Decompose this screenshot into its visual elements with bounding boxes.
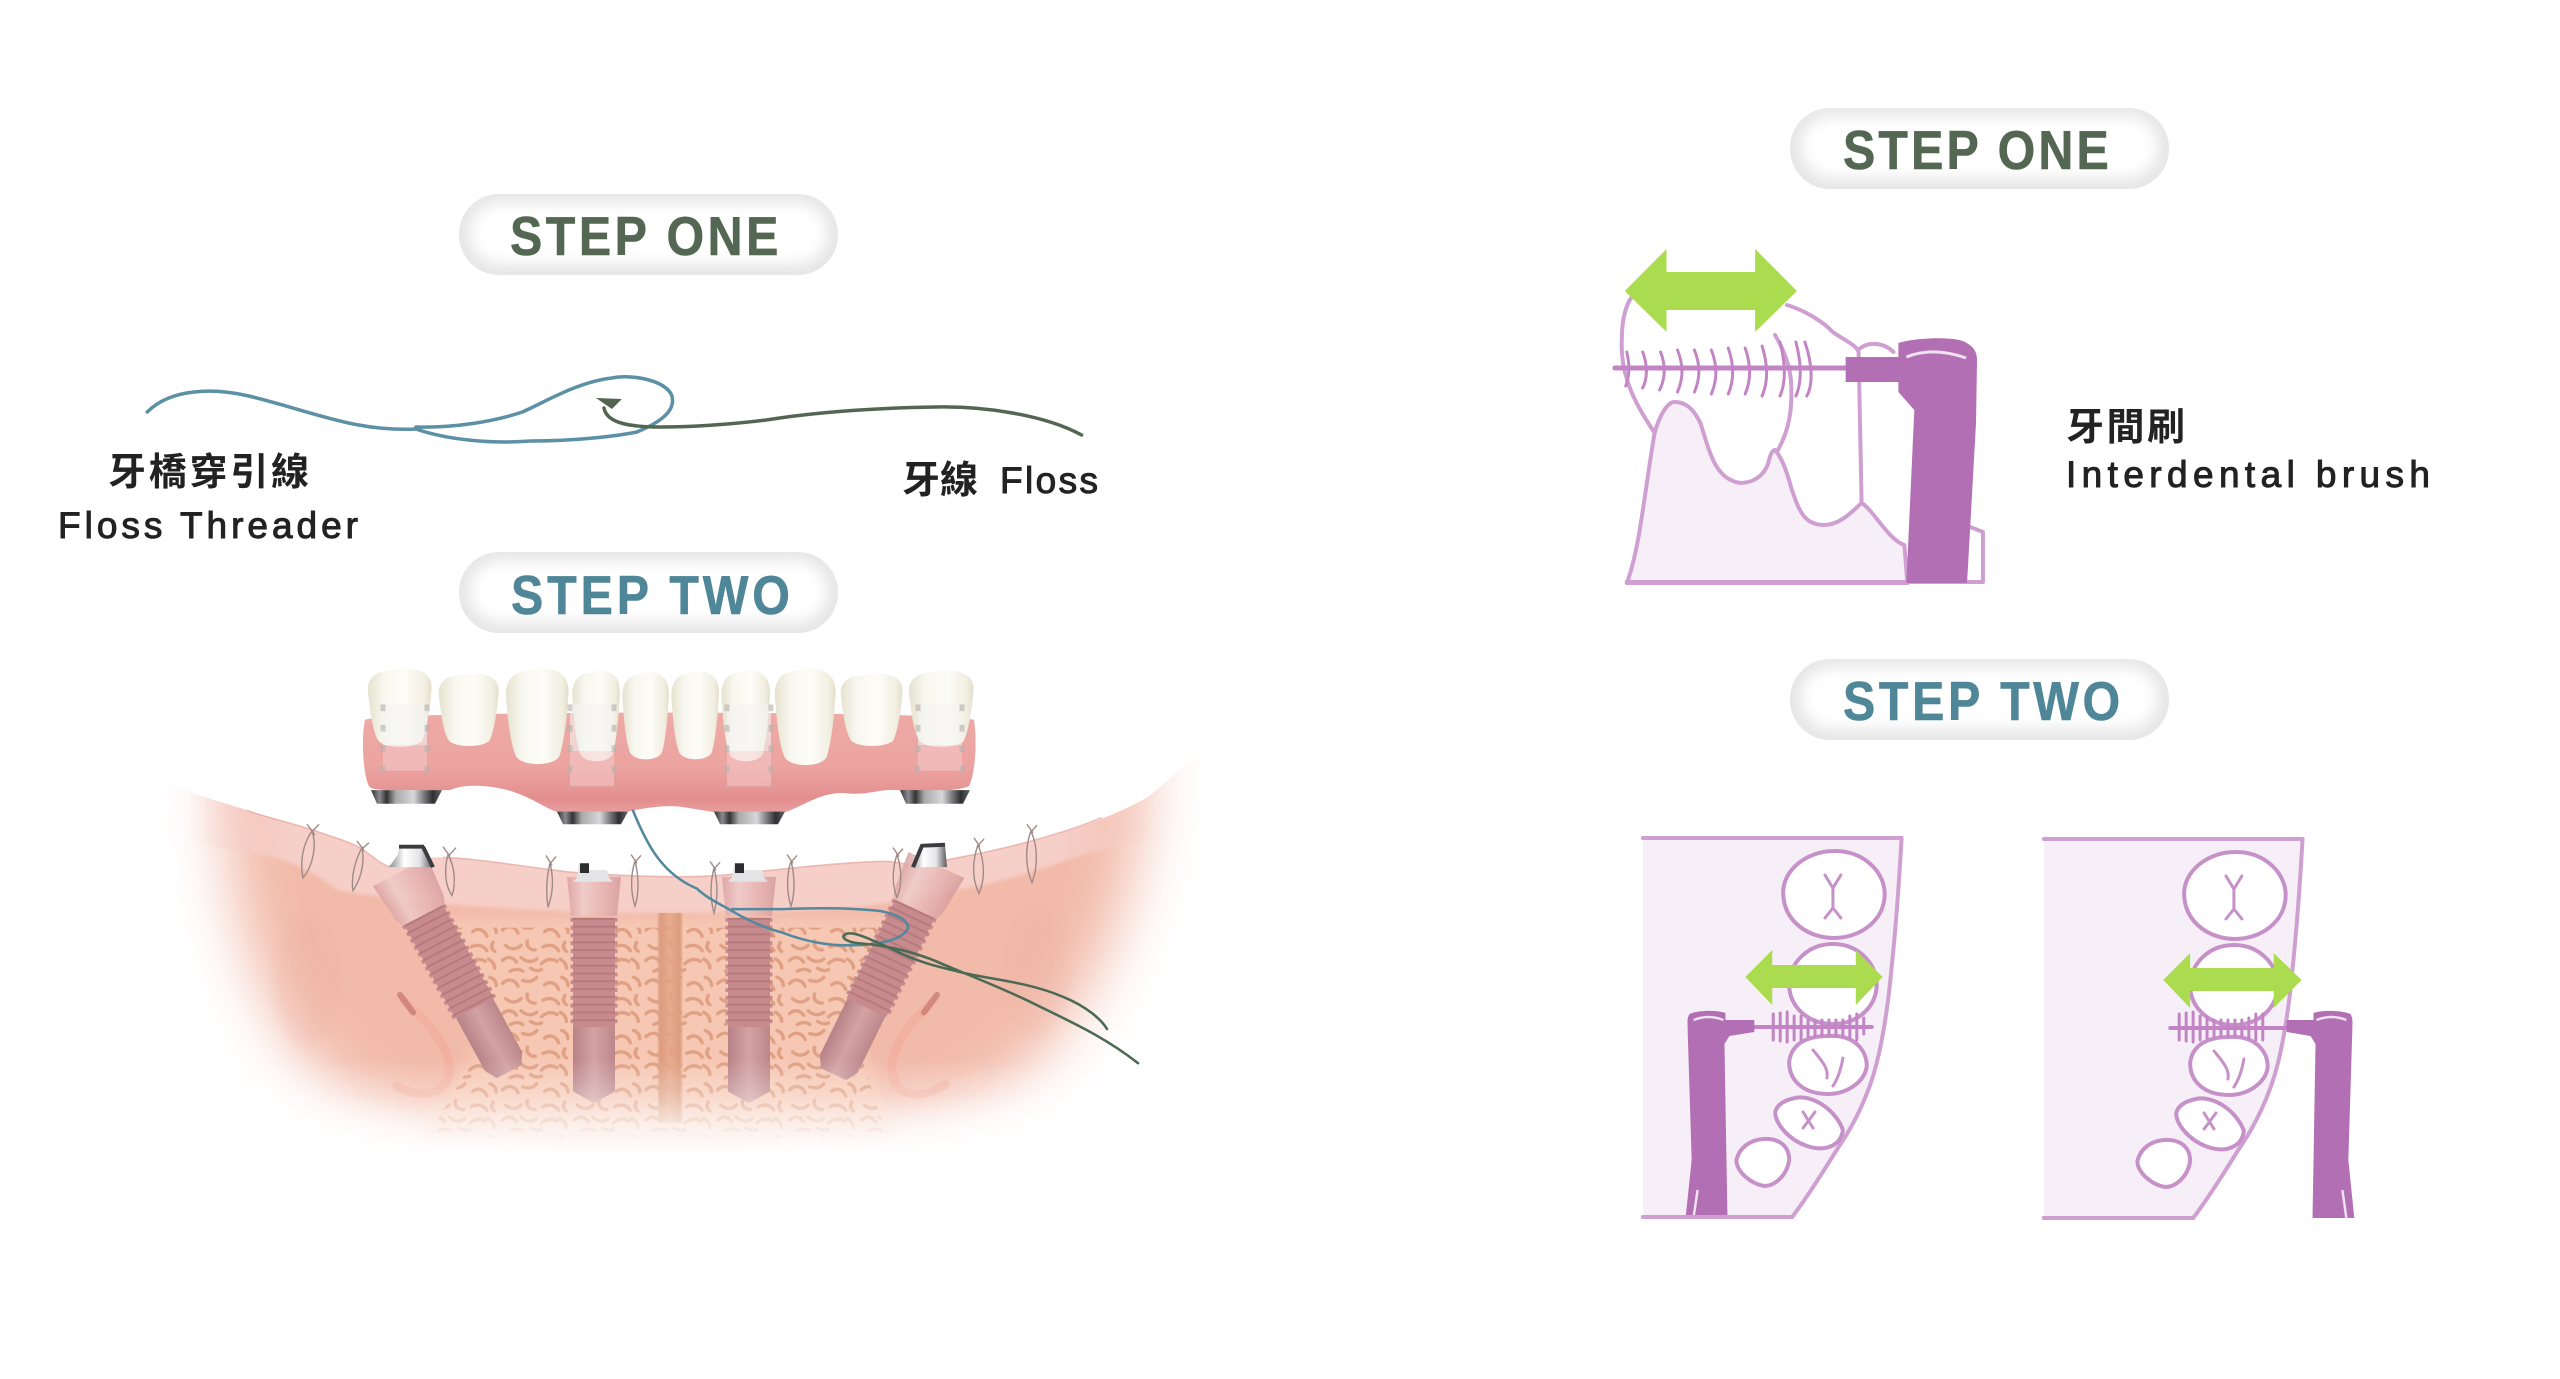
gum [1627,402,1907,583]
illustration: brush from the tongue side [1643,838,1902,1217]
illustration: brush from the cheek side [2044,839,2354,1218]
teeth row [368,668,974,765]
implant 4 [806,852,964,1087]
central canal [657,913,683,1123]
brush wire and bristles [2170,1012,2289,1042]
label: interdental brush [2066,407,2430,495]
step badge: right step one: STEP ONE [1843,119,2109,181]
bridge screw channels [383,704,962,788]
step badge: right step two: STEP TWO [1843,670,2120,732]
brush wire and bristles [1754,1012,1872,1042]
label: floss threader: 牙橋穿引線 [108,452,309,494]
brush wire and bristles [1615,342,1849,396]
implant 3 [722,877,776,1103]
tooth outlines [1622,297,1655,433]
double arrow [1745,950,1883,1005]
gum top edge [247,811,1102,877]
brush handle [1686,1011,1754,1217]
implant caps [389,845,947,882]
nerve curves [397,995,945,1094]
teeth [2137,852,2286,1187]
spongy bone [417,918,907,1137]
bottom fade [127,1059,1247,1313]
bridge abutments [371,790,970,824]
brush handle [1846,338,1977,583]
label: floss threader: Floss Threader [58,505,358,546]
sutures [302,824,1037,913]
label: floss [902,460,1098,502]
step badge: right step two [1790,659,2169,740]
floss threader and floss illustration [147,377,1082,442]
step badge: right step one [1790,108,2169,189]
illustration: interdental brush side view [1615,249,1983,583]
double arrow [1625,249,1797,332]
step badge: left step two [459,552,838,633]
teeth [1736,851,1885,1186]
label: interdental brush: 牙間刷 [2066,407,2185,449]
floss in implant illustration [843,933,1138,1063]
threader in implant illustration [633,811,908,945]
implant 1 [373,858,537,1086]
icon: floss arrowhead [596,398,622,409]
step badge: left step one: STEP ONE [510,205,778,267]
bridge gum base [363,713,976,815]
double arrow [2163,953,2302,1008]
label: floss: Floss [1000,460,1098,501]
step badge: left step one [459,194,838,275]
label: floss threader [58,452,358,546]
brush handle [2287,1011,2354,1218]
implant 2 [567,877,621,1103]
jaw [188,770,1181,1133]
label: floss: 牙線 [902,460,978,502]
jaw panel [2044,839,2303,1218]
step badge: left step two: STEP TWO [511,564,790,626]
label: interdental brush: Interdental brush [2066,454,2430,495]
jaw panel [1643,838,1902,1217]
illustration: implant jaw with bridge and floss threader [188,668,1181,1144]
